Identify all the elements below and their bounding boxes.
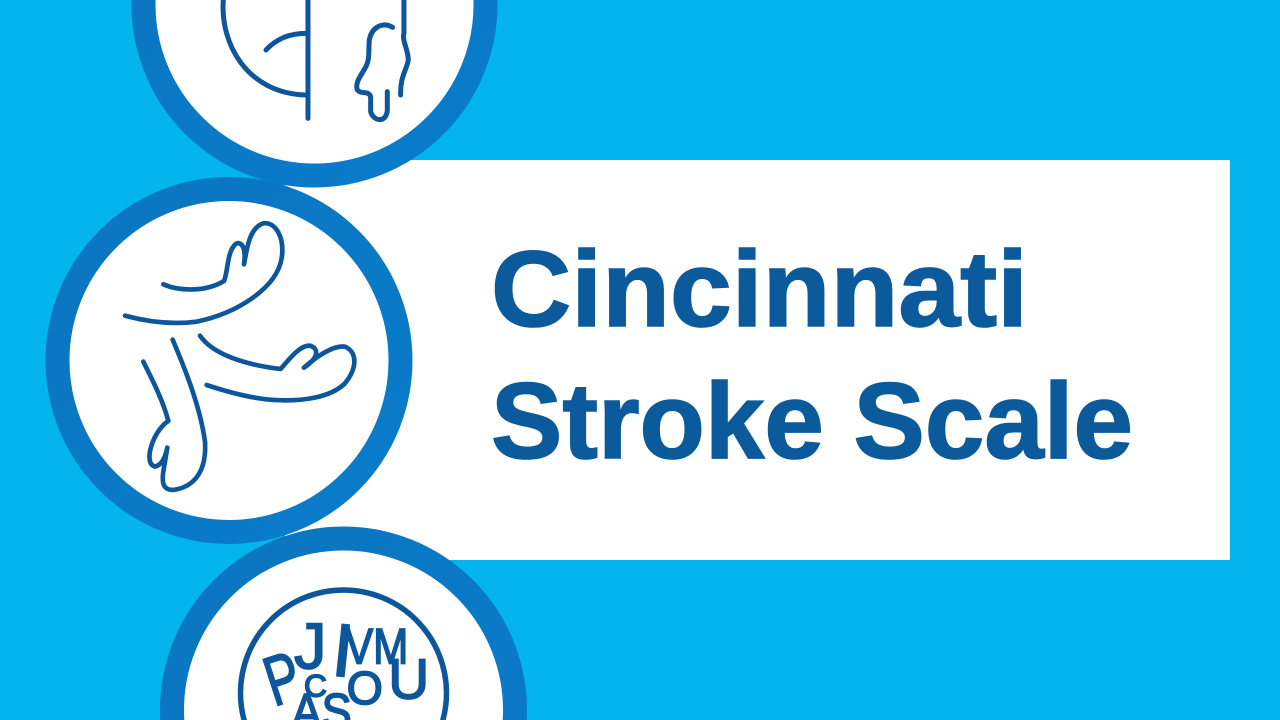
hand (357, 25, 393, 120)
lower arm (143, 340, 205, 490)
circle: speech test (172, 538, 515, 720)
title (491, 228, 1133, 481)
circle: facial droop test (144, 0, 486, 176)
title panel (285, 160, 1230, 560)
right arm (200, 336, 354, 400)
upper arm (125, 223, 282, 323)
icon: garbled speech letters: VM (345, 618, 408, 674)
icon: garbled speech letters: I (328, 607, 358, 693)
drooping mouth (266, 33, 306, 50)
title: Cincinnati (491, 228, 1028, 349)
icon: garbled speech letters: U (388, 648, 429, 711)
circle: arm drift test (58, 189, 400, 532)
icon: garbled speech letters: P (254, 636, 311, 720)
icon: garbled speech letters: C (304, 668, 327, 704)
arm (401, 0, 408, 95)
icon: garbled speech letters: O (347, 662, 383, 714)
icon: garbled speech letters: J (294, 609, 326, 682)
title: Stroke Scale (491, 360, 1133, 481)
icon: arms and hands (125, 223, 354, 490)
face outline (223, 0, 306, 95)
icon: garbled speech letters (240, 590, 446, 720)
icon: half face and drooping hand (223, 0, 408, 120)
face divider (300, 0, 315, 118)
